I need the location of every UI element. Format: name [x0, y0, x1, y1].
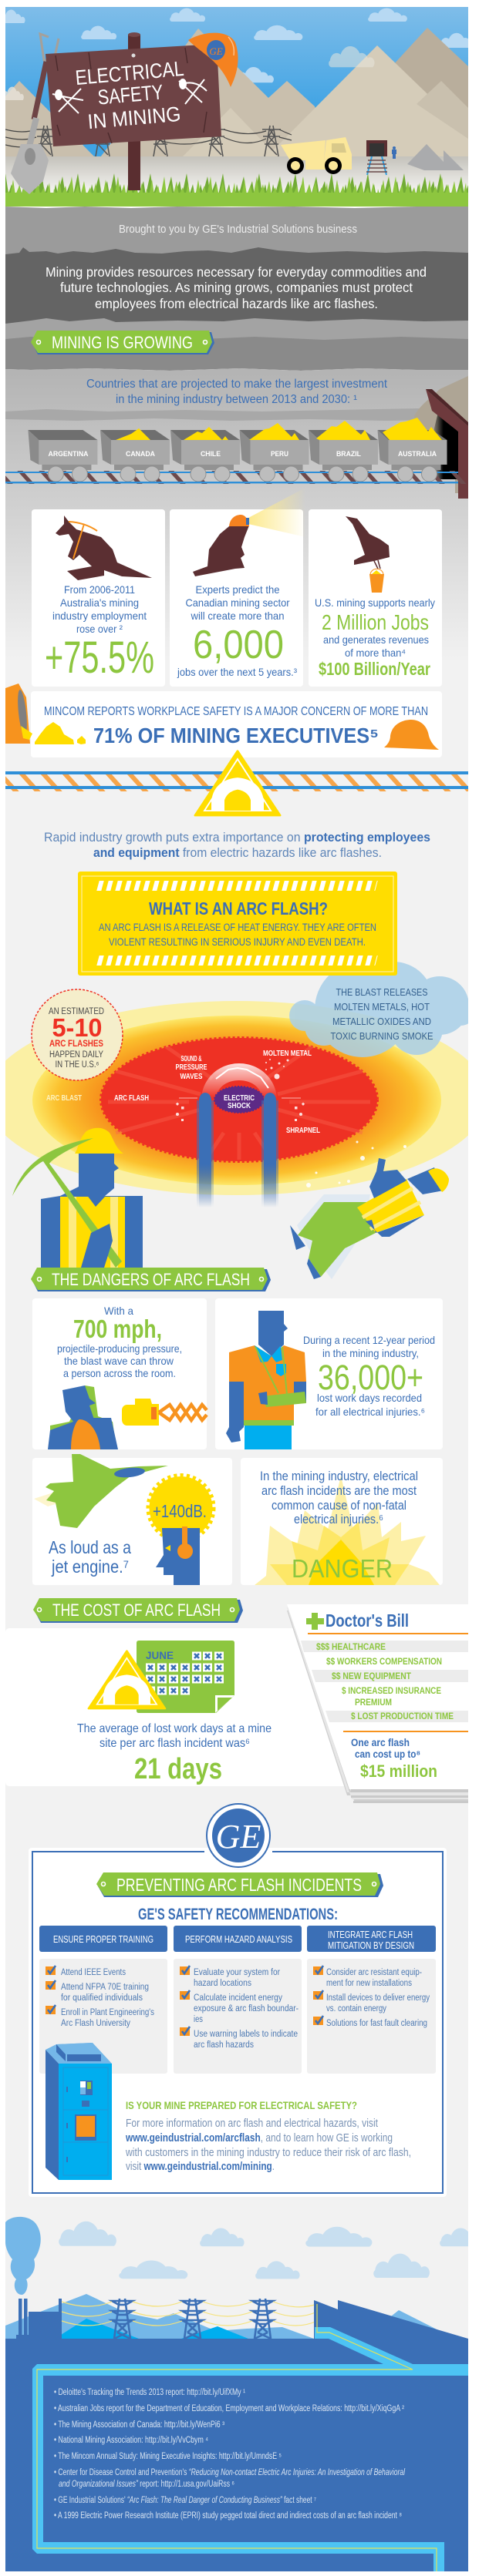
title: SAFETY — [96, 80, 164, 109]
icon: person struck — [48, 1385, 118, 1449]
column: hazard analysis: exposure & arc flash boundar- — [194, 2004, 299, 2013]
stat: 21 days: 21 days — [134, 1753, 222, 1785]
jet engine caption: jet engine.⁷ — [51, 1557, 129, 1577]
factory — [16, 2299, 62, 2339]
lost days text — [303, 1334, 435, 1418]
bill items: $$ NEW EQUIPMENT — [332, 1671, 412, 1681]
stat caption: jobs over the next 5 years.³ — [177, 666, 297, 678]
falling worker — [290, 1140, 449, 1279]
intro text: Mining provides resources necessary for everyday commodities and — [46, 264, 427, 280]
stat text: rose over ² — [76, 623, 123, 635]
label: sound and pressure waves: PRESSURE — [176, 1063, 207, 1072]
panel: what is an arc flash — [78, 872, 397, 976]
recommendations heading: GE'S SAFETY RECOMMENDATIONS: — [138, 1906, 338, 1923]
column: hazard analysis: Calculate incident energy — [194, 1993, 282, 2003]
column: training — [39, 1926, 167, 2074]
jet engine caption — [49, 1537, 131, 1577]
lost days text: lost work days recorded — [317, 1392, 422, 1404]
smoke plume — [5, 2217, 41, 2295]
growth paragraph — [44, 830, 430, 860]
call to action text: with customers in the mining industry to reduce their risk of arc flash, — [125, 2147, 411, 2159]
blast text — [57, 1305, 182, 1379]
panel: Australia — [32, 509, 165, 687]
danger word: DANGER — [292, 1554, 393, 1583]
panel: Canada — [170, 488, 305, 687]
source list: • Center for Disease Control and Prevention's “Reducing Non-contact Electric Arc Injuries: An Investigation of Behavioral — [54, 2468, 405, 2477]
cart: Peru — [239, 423, 309, 482]
column: mitigation: Install devices to deliver energy — [326, 1993, 430, 2003]
column: hazard analysis — [174, 1926, 302, 2074]
grass — [5, 173, 468, 207]
icon: jet — [34, 1454, 168, 1528]
panel: doctor's bill — [287, 1604, 477, 1803]
source list: • Deloitte's Tracking the Trends 2013 report: http://bit.ly/UifXMy ¹ — [54, 2388, 245, 2397]
source list: • GE Industrial Solutions' “Arc Flash: The Real Danger of Conducting Business” fact sheet ⁷ — [54, 2496, 316, 2505]
clouds in sky — [0, 8, 475, 82]
worker with pick — [12, 1128, 143, 1268]
molten metal sparks — [265, 1059, 288, 1079]
icons: shovel and pick — [52, 79, 207, 113]
stat: jobs: 2 Million Jobs — [322, 610, 429, 634]
cart: Australia — [378, 418, 447, 482]
column: hazard analysis: hazard locations — [194, 1979, 251, 1988]
smoke cloud — [289, 962, 474, 1057]
source list: • The Mining Association of Canada: http://bit.ly/WenPi6 ³ — [54, 2420, 224, 2430]
electric shock core — [214, 1086, 264, 1113]
stat: 36,000+: 36,000+ — [318, 1358, 423, 1397]
stat text: Canadian mining sector — [185, 596, 290, 609]
stat: 700 mph: 700 mph, — [73, 1315, 162, 1343]
stat text: will create more than — [191, 610, 284, 622]
banner: mining is growing — [31, 331, 214, 354]
stat text: and generates revenues — [323, 633, 429, 646]
bill total — [351, 1736, 420, 1760]
stat text — [186, 586, 290, 620]
stat text — [52, 586, 147, 633]
column: training: Attend NFPA 70E training — [61, 1983, 149, 1992]
light beam — [248, 492, 301, 536]
stat text: U.S. mining supports nearly — [315, 596, 435, 609]
lost days text: in the mining industry, — [322, 1347, 419, 1359]
page background — [5, 663, 468, 2343]
column: mitigation — [307, 1926, 436, 2074]
cart: Brazil — [309, 421, 378, 482]
growth paragraph: and equipment from electric hazards like arc flashes. — [93, 845, 382, 860]
cart: Chile — [170, 427, 240, 482]
stat: 6,000: 6,000 — [193, 623, 284, 667]
source list — [54, 2388, 405, 2521]
panel: lost work days — [215, 1298, 443, 1449]
arc flash heading: WHAT IS AN ARC FLASH? — [149, 898, 328, 919]
bill items: $ LOST PRODUCTION TIME — [351, 1711, 454, 1721]
icon: head with headphones — [156, 1526, 200, 1585]
panel: common cause — [241, 1458, 443, 1585]
icon: injured man — [226, 1311, 306, 1449]
building — [314, 2300, 468, 2339]
call to action text: www.geindustrial.com/arcflash, and to learn how GE is working — [125, 2132, 393, 2144]
panel: Mincom — [31, 691, 442, 757]
cart: Brazil: BRAZIL — [336, 450, 361, 458]
seal: arc flash frequency: AN ESTIMATED — [49, 1007, 104, 1016]
cart: Peru: PERU — [271, 450, 288, 458]
stat text: of more than⁴ — [345, 647, 406, 659]
seal: arc flash frequency: IN THE U.S.⁶ — [56, 1060, 100, 1070]
icon: hard hat — [384, 720, 439, 750]
smoke text — [330, 986, 433, 1042]
label: shrapnel: SHRAPNEL — [286, 1126, 320, 1135]
common cause text: arc flash incidents are the most — [261, 1484, 417, 1498]
cost text — [77, 1722, 272, 1750]
seal: arc flash frequency: HAPPEN DAILY — [49, 1050, 103, 1060]
panel: United States — [309, 509, 442, 687]
icon: orange hard hat: GE — [209, 45, 223, 57]
cart: Argentina: ARGENTINA — [48, 450, 89, 458]
mountains — [5, 28, 468, 157]
explosion — [255, 1476, 440, 1585]
title: IN MINING — [86, 102, 182, 133]
stat text: From 2006-2011 — [64, 583, 135, 596]
stat text: industry employment — [52, 610, 147, 622]
arc flash definition — [99, 922, 376, 948]
column: training: Attend IEEE Events — [61, 1968, 126, 1977]
bill items: $ INCREASED INSURANCE — [342, 1685, 441, 1696]
header scene — [0, 7, 475, 207]
label: molten metal: MOLTEN METAL — [263, 1049, 312, 1058]
decibel starburst — [150, 1476, 213, 1540]
icon: calendar — [137, 1641, 234, 1713]
column: mitigation: Consider arc resistant equip- — [326, 1968, 422, 1977]
smoke text: THE BLAST RELEASES — [336, 986, 428, 998]
cart: Australia: AUSTRALIA — [398, 450, 437, 458]
banner: cost: THE COST OF ARC FLASH — [52, 1600, 221, 1620]
label: arc flash: ARC FLASH — [114, 1093, 149, 1103]
stat: +75.5%: +75.5% — [45, 633, 154, 683]
warning triangle — [195, 751, 280, 815]
smoke text: MOLTEN METALS, HOT — [334, 1001, 430, 1013]
electric shock core: ELECTRIC — [224, 1093, 255, 1103]
smoke text: TOXIC BURNING SMOKE — [330, 1030, 433, 1042]
dump truck — [281, 137, 352, 174]
call to action text: For more information on arc flash and electrical hazards, visit — [126, 2118, 378, 2130]
icon: tipping orange cart — [5, 683, 32, 744]
GE logo — [204, 1802, 272, 1869]
electrodes — [197, 1093, 278, 1207]
arc flash definition: VIOLENT RESULTING IN SERIOUS INJURY AND EVEN DEATH. — [109, 936, 366, 948]
pylons — [112, 2299, 273, 2339]
column: hazard analysis: arc flash hazards — [194, 2040, 254, 2050]
banner: cost — [33, 1598, 243, 1623]
mine section background — [5, 318, 468, 663]
label: sound and pressure waves: WAVES — [180, 1072, 202, 1081]
stat text: Australia's mining — [60, 596, 139, 609]
blast text: projectile-producing pressure, — [57, 1342, 182, 1355]
light rays — [108, 1046, 370, 1160]
bill total: One arc flash — [351, 1736, 410, 1748]
icon: eagle with bucket — [346, 516, 390, 593]
byline: Brought to you by GE's Industrial Solutions business — [119, 223, 357, 236]
electric shock core: SHOCK — [228, 1101, 251, 1110]
cart: Canada — [100, 428, 170, 482]
jet engine caption: As loud as a — [49, 1537, 131, 1557]
title: ELECTRICAL — [74, 57, 185, 89]
yellow wires — [62, 2302, 317, 2326]
smoke text: METALLIC OXIDES AND — [332, 1016, 431, 1027]
railway track — [0, 771, 479, 789]
mincom stat: 71% OF MINING EXECUTIVES⁵ — [93, 724, 379, 747]
intro text: future technologies. As mining grows, companies must protect — [60, 280, 413, 295]
cost text: The average of lost work days at a mine — [77, 1722, 272, 1735]
panel: blast pressure — [32, 1298, 207, 1449]
investment intro text — [86, 378, 388, 406]
banner: mining is growing: MINING IS GROWING — [52, 333, 193, 352]
icon: kangaroo — [56, 516, 152, 580]
icon: beaver with helmet — [193, 515, 249, 576]
blast text: a person across the room. — [63, 1367, 176, 1379]
blast text: With a — [104, 1305, 133, 1317]
label: arc blast: ARC BLAST — [46, 1093, 82, 1103]
banner: preventing — [96, 1872, 383, 1897]
icon: warning triangle — [89, 1651, 165, 1708]
mine tunnel entrance — [414, 376, 468, 499]
cart: Chile: CHILE — [201, 450, 221, 458]
gray soil band — [5, 207, 468, 256]
stat text: Experts predict the — [196, 583, 280, 596]
power lines — [5, 126, 292, 156]
banner: dangers — [31, 1268, 271, 1291]
shovel — [11, 34, 59, 194]
seal: arc flash frequency: ARC FLASHES — [49, 1038, 103, 1049]
investment intro text: in the mining industry between 2013 and 2030: ¹ — [116, 393, 357, 406]
banner: preventing: PREVENTING ARC FLASH INCIDENTS — [116, 1875, 362, 1895]
common cause text: common cause of non-fatal — [272, 1499, 406, 1513]
stat: $15 million: $15 million — [360, 1762, 437, 1781]
bill items — [316, 1641, 454, 1721]
call to action text — [125, 2118, 411, 2173]
title — [76, 62, 184, 129]
column: mitigation: vs. contain energy — [326, 2004, 386, 2013]
blast text: the blast wave can throw — [64, 1355, 174, 1367]
bill title: Doctor's Bill — [326, 1610, 409, 1631]
track with carts — [0, 418, 474, 483]
title sign — [46, 44, 221, 146]
source list: • National Mining Association: http://bit.ly/VvCbym ⁴ — [54, 2436, 208, 2445]
icon: boxing glove — [122, 1399, 207, 1426]
decibel starburst: +140dB. — [153, 1501, 207, 1521]
bill items: $$ WORKERS COMPENSATION — [326, 1656, 442, 1667]
common cause text — [260, 1469, 418, 1526]
column: mitigation: INTEGRATE ARC FLASH — [328, 1929, 413, 1940]
icon: gold nuggets — [35, 722, 86, 744]
cart: Canada: CANADA — [126, 450, 155, 458]
seal: arc flash frequency: 5-10 — [52, 1013, 102, 1042]
column: hazard analysis: ies — [194, 2015, 203, 2024]
power landscape — [5, 2294, 468, 2339]
label: sound and pressure waves: SOUND & — [180, 1054, 202, 1063]
common cause text: electrical injuries.⁶ — [294, 1513, 383, 1526]
icon: electrical cabinet — [46, 2043, 112, 2180]
cart: Argentina — [28, 430, 97, 482]
shrapnel pieces — [176, 1098, 305, 1121]
mine entrance and worker — [366, 140, 396, 175]
panel: preventing incidents — [29, 1802, 447, 2197]
common cause text: In the mining industry, electrical — [260, 1469, 418, 1483]
dark intro panel — [5, 247, 468, 324]
column: mitigation: Solutions for fast fault clearing — [326, 2019, 427, 2028]
label: sound and pressure waves — [176, 1054, 207, 1081]
column: mitigation: MITIGATION BY DESIGN — [328, 1940, 414, 1951]
column: training: ENSURE PROPER TRAINING — [53, 1934, 153, 1945]
call to action text: visit www.geindustrial.com/mining. — [126, 2161, 275, 2173]
source list: and Organizational Issues” report: http://1.usa.gov/UaiRss ⁶ — [59, 2480, 234, 2489]
call to action heading: IS YOUR MINE PREPARED FOR ELECTRICAL SAFETY? — [126, 2099, 357, 2111]
GE logo: GE — [216, 1818, 261, 1856]
sign post — [128, 32, 140, 190]
arc flash definition: AN ARC FLASH IS A RELEASE OF HEAT ENERGY. THEY ARE OFTEN — [99, 922, 376, 933]
intro text: employees from electrical hazards like arc flashes. — [95, 296, 378, 311]
gravel piles — [407, 144, 464, 170]
bottom clouds — [59, 2222, 479, 2279]
cost text: site per arc flash incident was⁶ — [100, 1737, 250, 1750]
column: training: Arc Flash University — [61, 2019, 130, 2028]
icon: medical plus — [306, 1613, 324, 1630]
bill total: can cost up to⁸ — [355, 1748, 420, 1760]
column: hazard analysis: PERFORM HAZARD ANALYSIS — [185, 1934, 292, 1945]
panel: jet engine noise — [32, 1454, 232, 1585]
bill items: $$$ HEALTHCARE — [316, 1641, 386, 1652]
column: hazard analysis: Use warning labels to indicate — [194, 2030, 298, 2039]
arc — [201, 1063, 277, 1098]
investment intro text: Countries that are projected to make the largest investment — [86, 378, 388, 391]
icon: calendar: JUNE — [146, 1649, 174, 1661]
source list: • The Mincom Annual Study: Mining Executive Insights: http://bit.ly/UmndsE ⁵ — [54, 2452, 282, 2461]
column: hazard analysis: Evaluate your system for — [194, 1968, 280, 1977]
lost days text: During a recent 12-year period — [303, 1334, 435, 1346]
seal: arc flash frequency — [32, 989, 123, 1080]
panel: references — [5, 2304, 468, 2571]
column: training: Enroll in Plant Engineering's — [61, 2008, 154, 2017]
lost days text: for all electrical injuries.⁶ — [315, 1406, 425, 1418]
column: training: for qualified individuals — [61, 1993, 143, 2003]
column: mitigation: ment for new installations — [326, 1979, 412, 1988]
diagram: arc flash blast — [0, 1001, 479, 1207]
intro text — [46, 264, 427, 311]
icon: orange hard hat — [188, 33, 238, 87]
banner: dangers: THE DANGERS OF ARC FLASH — [52, 1270, 250, 1289]
stat: revenue: $100 Billion/Year — [319, 659, 430, 679]
bill items: PREMIUM — [355, 1697, 392, 1708]
panel: lost days cost — [5, 1628, 360, 1786]
growth paragraph: Rapid industry growth puts extra importance on protecting employees — [44, 830, 430, 845]
